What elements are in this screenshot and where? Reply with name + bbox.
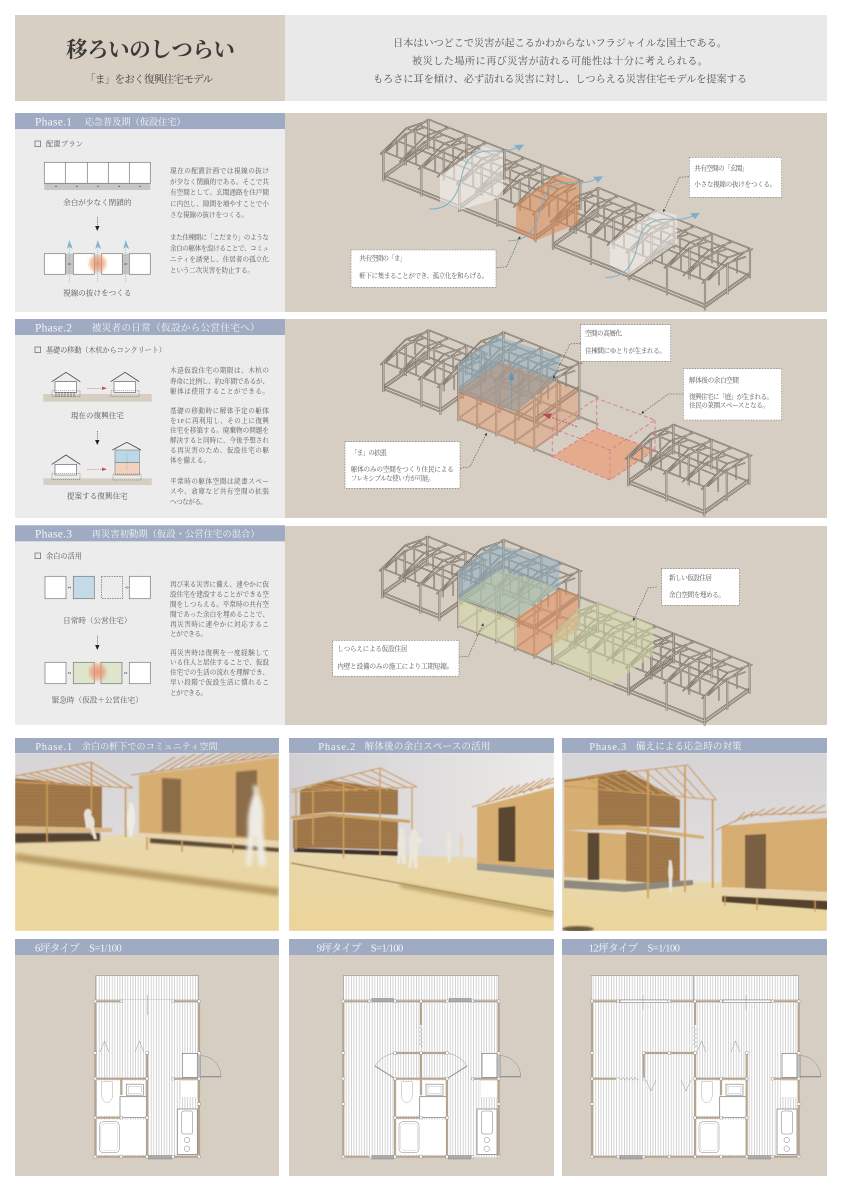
diagram: closed layout xyxy=(44,162,150,190)
callout: high-rise: 空間の高層化 xyxy=(585,329,622,338)
phase 1 heading: 応急普及期（仮設住宅） xyxy=(85,116,186,128)
header: title panel xyxy=(15,15,285,101)
diagram: sight lines xyxy=(44,240,150,282)
frame: existing left xyxy=(380,330,488,415)
volume: entrance void 1 xyxy=(440,147,503,210)
body text: へつながる。 xyxy=(170,498,207,506)
body text: 余白の躯体を設けることで、コミュ xyxy=(170,244,269,253)
callout: prompt construction: しつらえによる仮設住居 xyxy=(337,644,408,653)
body text: とができる。 xyxy=(170,689,207,697)
body text: さな視線の抜けをつくる。 xyxy=(170,210,248,219)
callout: new housing: 新しい仮設住居 xyxy=(669,573,712,582)
body text: 基礎の移動時に解体予定の躯体 xyxy=(170,406,269,415)
frame: upper housing xyxy=(455,540,582,632)
volume: new temporary housing xyxy=(553,602,653,685)
callout: new housing: 余白空間を埋める。 xyxy=(669,590,725,599)
body text: る再災害のため、仮設住宅の躯 xyxy=(170,445,269,454)
plan panel: 6 tsubo xyxy=(15,939,279,1176)
photo heading 1: Phase.1 xyxy=(35,742,72,753)
callout: high-rise: 住棟間にゆとりが生まれる。 xyxy=(585,346,666,355)
body text: 住宅での生活の流れを理解でき、 xyxy=(170,668,269,677)
body text: 住宅を移築する。廃棄物の問題を xyxy=(170,426,269,435)
phase 1 heading xyxy=(15,113,285,129)
arrow down xyxy=(95,636,100,650)
body text: 有空間として、玄関通路を住戸間 xyxy=(170,188,269,197)
caption: normal: 日常時（公営住宅） xyxy=(63,615,131,625)
callout: ma expansion: フレキシブルな使い方が可能。 xyxy=(351,474,435,483)
body text: が少なく閉鎖的である。そこで共 xyxy=(170,177,269,186)
callout: ma xyxy=(351,237,520,287)
photo heading 1 xyxy=(15,738,279,753)
plan heading 6 xyxy=(15,939,279,955)
plan heading 6: 6坪タイプ S=1/100 xyxy=(35,942,122,954)
body text: に内包し、隙間を増やすことで小 xyxy=(170,199,269,208)
callout: prompt construction: 内壁と設備のみの施工により工期短縮。 xyxy=(337,662,453,671)
plan panel: 12 tsubo xyxy=(562,939,827,1176)
header: concept statement: 被災した場所に再び災害が訪れる可能性は十分に考えられる。 xyxy=(412,54,708,68)
body text: 木造仮設住宅の期限は、木杭の xyxy=(170,365,269,374)
panel: phase 2 axonometric xyxy=(285,319,827,518)
frame: lower skeleton xyxy=(458,359,598,456)
flow arrow 3 xyxy=(605,213,700,277)
body text: 再災害時は復興を一度経験して xyxy=(170,648,269,657)
arrow down xyxy=(95,431,100,445)
header: concept statement xyxy=(285,15,827,101)
arrow down xyxy=(95,217,100,231)
plane: floor green xyxy=(458,570,559,617)
body text: 体を備える。 xyxy=(170,455,210,464)
photo 1: model xyxy=(15,748,282,931)
callout: ma: 共有空間の「ま」 xyxy=(359,254,406,263)
plan heading 9 xyxy=(289,939,554,955)
photo heading 3 xyxy=(562,738,827,753)
phase 2 heading xyxy=(15,319,285,335)
body text xyxy=(170,365,269,506)
photo heading 3: 備えによる応急時の対策 xyxy=(636,740,742,752)
phase 3 heading xyxy=(15,525,285,541)
phase 2 heading: 被災者の日常（仮設から公営住宅へ） xyxy=(92,321,260,334)
volume: upper storey xyxy=(458,336,561,412)
panel: phase 1 axonometric xyxy=(285,113,827,312)
frame: row 2 xyxy=(550,188,753,310)
photo panel: phase 3 xyxy=(562,738,829,932)
frame: row 1 xyxy=(380,119,583,242)
volume: orange xyxy=(517,589,578,655)
flow arrow 1 xyxy=(429,144,524,209)
photo 2: model xyxy=(289,753,556,931)
volume: upper blue xyxy=(458,544,559,617)
photo 3: model xyxy=(562,753,829,932)
frame: existing left xyxy=(379,536,487,621)
body text: 間をしつらえる。平常時の共有空 xyxy=(170,599,269,608)
header: concept statement: 日本はいつどこで災害が起こるかわからないフラジャイルな国土である。 xyxy=(393,36,727,50)
body text: いる住人と居住することで、仮設 xyxy=(170,658,269,667)
body text: 間であった余白を埋めることで、 xyxy=(170,609,269,618)
frame: raised housing xyxy=(455,332,582,424)
title: 移ろいのしつらい xyxy=(66,38,235,62)
caption: closed: 余白が少なく閉鎖的 xyxy=(63,197,132,207)
body text: 現在の配置計画では視線の抜け xyxy=(170,166,269,175)
sub heading: layout plan: 配置プラン xyxy=(46,139,83,148)
photo heading 1: 余白の軒下でのコミュニティ空間 xyxy=(82,740,218,752)
panel: phase 2 explanation xyxy=(15,319,285,518)
plan heading 12: 12坪タイプ S=1/100 xyxy=(589,942,680,954)
plan heading 9: 9坪タイプ S=1/100 xyxy=(317,942,403,954)
frame: existing right xyxy=(625,424,752,517)
flow arrow 2 xyxy=(508,176,603,241)
photo heading 2: Phase.2 xyxy=(318,742,355,753)
sub heading: layout plan xyxy=(35,139,83,148)
body text: を1Fに再利用し、その上に復興 xyxy=(170,416,269,425)
body text: ニティを誘発し、住居者の孤立化 xyxy=(170,254,269,263)
caption: sight lines: 視線の抜けをつくる xyxy=(63,287,131,297)
callout: open space: 解体後の余白空間 xyxy=(689,375,739,384)
sub heading: foundation move: 基礎の移動（木杭からコンクリート） xyxy=(46,345,166,354)
caption: proposed: 提案する復興住宅 xyxy=(67,490,128,500)
callout: ma: 軒下に集まることができ、孤立化を和らげる。 xyxy=(359,271,488,280)
volume: lower storey xyxy=(458,362,578,450)
caption: current: 現在の復興住宅 xyxy=(71,410,124,420)
volume: entrance void 2 xyxy=(610,210,677,275)
photo panel: phase 1 xyxy=(15,738,282,931)
callout: entrance: 共有空間の「玄関」 xyxy=(694,164,748,173)
phase 3 heading: 再災害初動期（仮設・公営住宅の混合） xyxy=(92,528,260,540)
callout: ma expansion: 躯体のみの空間をつくり住民による xyxy=(351,465,454,474)
body text: 設住宅を建設することができる空 xyxy=(170,590,269,599)
body text: 寿命に比例し、約2年間であるが、 xyxy=(170,377,269,386)
dashed box: removed volume xyxy=(552,398,655,480)
photo heading 2: 解体後の余白スペースの活用 xyxy=(364,740,490,752)
body text: 解決すると同時に、今後予想され xyxy=(170,436,269,445)
volume: shared ma space xyxy=(516,174,579,241)
body text xyxy=(170,166,269,274)
panel: phase 3 axonometric xyxy=(285,526,827,726)
diagram: normal times xyxy=(45,576,150,599)
phase 1 heading: Phase.1 xyxy=(35,116,72,128)
body text: スや、倉庫など共有空間の拡張 xyxy=(170,487,269,496)
callout: ma expansion: 「ま」の拡張 xyxy=(351,448,387,457)
body text: 平常時の躯体空間は読書スペー xyxy=(170,476,269,485)
callout: prompt construction xyxy=(333,624,483,676)
photo heading 2 xyxy=(289,738,554,753)
phase 3 heading: Phase.3 xyxy=(35,528,72,540)
floor plan: 12 tsubo xyxy=(591,976,821,1159)
body text: 再び来る災害に備え、速やかに仮 xyxy=(170,580,269,589)
caption: emergency: 緊急時（仮設＋公営住宅） xyxy=(52,694,143,704)
subtitle: 「ま」をおく復興住宅モデル xyxy=(85,72,214,86)
diagram: emergency xyxy=(45,661,150,684)
photo heading 3: Phase.3 xyxy=(589,742,626,753)
callout: high-rise xyxy=(553,325,671,378)
callout: open space xyxy=(642,369,782,420)
sub heading: use of open space xyxy=(35,551,82,560)
plan heading 12 xyxy=(562,939,827,955)
body text: とができる。 xyxy=(170,630,207,638)
floor plan: 9 tsubo xyxy=(342,976,521,1159)
body text: また住棟間に「こだまり」のような xyxy=(170,233,269,242)
callout: entrance xyxy=(663,157,782,212)
floor plan: 6 tsubo xyxy=(94,976,221,1159)
arrow: relocation xyxy=(542,414,577,427)
photo panel: phase 2 xyxy=(289,738,556,931)
plane: raised floor xyxy=(458,362,555,412)
phase 2 heading: Phase.2 xyxy=(35,322,72,334)
arrow: raise up xyxy=(509,372,514,410)
header: concept statement: もろさに耳を傾け、必ず訪れる災害に対し、しつらえる災害住宅モデルを提案する xyxy=(373,72,747,86)
diagram: current housing xyxy=(43,372,152,402)
frame: right row xyxy=(550,603,753,726)
callout: open space: 復興住宅に「庭」が生まれる。 xyxy=(689,392,773,401)
frame: lower skeleton xyxy=(458,566,598,663)
body text xyxy=(170,580,269,697)
sub heading: use of open space: 余白の活用 xyxy=(46,551,82,560)
callout: new housing xyxy=(633,569,739,620)
callout: ma expansion xyxy=(345,433,487,488)
plan panel: 9 tsubo xyxy=(289,939,554,1176)
callout: entrance: 小さな視線の抜けをつくる。 xyxy=(694,180,776,189)
body text: 早い段階で仮設生活に慣れるこ xyxy=(170,678,269,687)
callout: open space: 住民の菜園スペースとなる。 xyxy=(689,400,769,409)
diagram: proposed housing xyxy=(43,442,152,485)
volume: lower green xyxy=(458,599,517,648)
body text: 再災害時に速やかに対応するこ xyxy=(170,619,269,628)
body text: 躯体は使用することができる。 xyxy=(170,386,269,395)
plane: garden xyxy=(552,428,655,480)
panel: phase 3 explanation xyxy=(15,525,285,725)
body text: という二次災害を防止する。 xyxy=(170,265,254,274)
panel: phase 1 explanation xyxy=(15,113,285,312)
